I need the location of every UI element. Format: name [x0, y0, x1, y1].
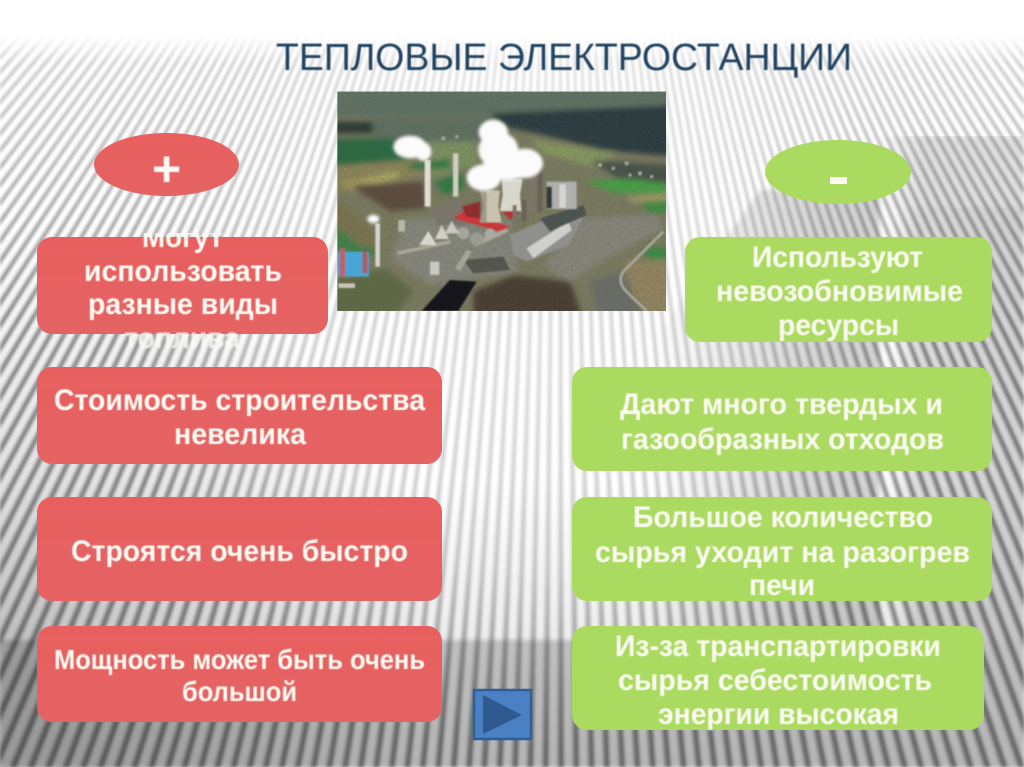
smoke plumes: [367, 120, 543, 223]
chimneys: [425, 160, 431, 207]
panel: con 2: [572, 367, 992, 471]
panel: pro 1: Могут: [142, 221, 223, 254]
panel: pro 2: невелика: [174, 418, 306, 451]
minus badge: [765, 140, 911, 204]
panel: pro 3: [37, 497, 442, 601]
panel: con 4: энергии высокая: [658, 698, 899, 731]
panel: pro 4: большой: [182, 676, 297, 707]
panel: con 3: [572, 497, 992, 602]
road: [621, 232, 663, 311]
panel: con 3: сырья уходит на разогрев: [595, 536, 970, 569]
panel: con 2: газообразных отходов: [621, 423, 944, 456]
title: ТЕПЛОВЫЕ ЭЛЕКТРОСТАНЦИИ: [276, 37, 852, 79]
icon: next arrow button: [474, 690, 531, 739]
plus badge: [94, 133, 239, 197]
panel: pro 1: использовать: [84, 255, 282, 288]
panel: con 1: невозобновимые: [716, 275, 963, 308]
panel: con 2: Дают много твердых и: [620, 388, 943, 421]
panel: pro 2: [37, 367, 442, 464]
village: [441, 135, 653, 178]
panel: pro 3: Строятся очень быстро: [71, 535, 408, 568]
panel: pro 1: разные виды: [88, 288, 278, 321]
panel: pro 4: [37, 626, 442, 722]
plus badge: +: [152, 141, 181, 197]
panel: con 4: сырья себестоимость: [618, 664, 932, 697]
panel: con 3: печи: [749, 569, 815, 602]
panel: pro 1: [37, 233, 328, 349]
panel: con 1: ресурсы: [778, 309, 899, 342]
panel: con 4: [572, 626, 984, 731]
photo texture: [337, 92, 666, 311]
panel: pro 2: Стоимость строительства: [54, 384, 425, 417]
panel: con 4: Из-за транспартировки: [615, 630, 941, 663]
panel: con 1: [685, 237, 992, 342]
plant buildings: [337, 153, 587, 288]
panel: con 1: Используют: [752, 241, 923, 274]
panel: con 3: Большое количество: [633, 501, 933, 534]
cooling towers: [480, 190, 502, 222]
panel: pro 4: Мощность может быть очень: [54, 644, 425, 675]
photo: thermal power plant aerial view: [330, 85, 673, 318]
panel: pro 1: топлива: [124, 322, 240, 355]
coal yard: [422, 280, 477, 311]
